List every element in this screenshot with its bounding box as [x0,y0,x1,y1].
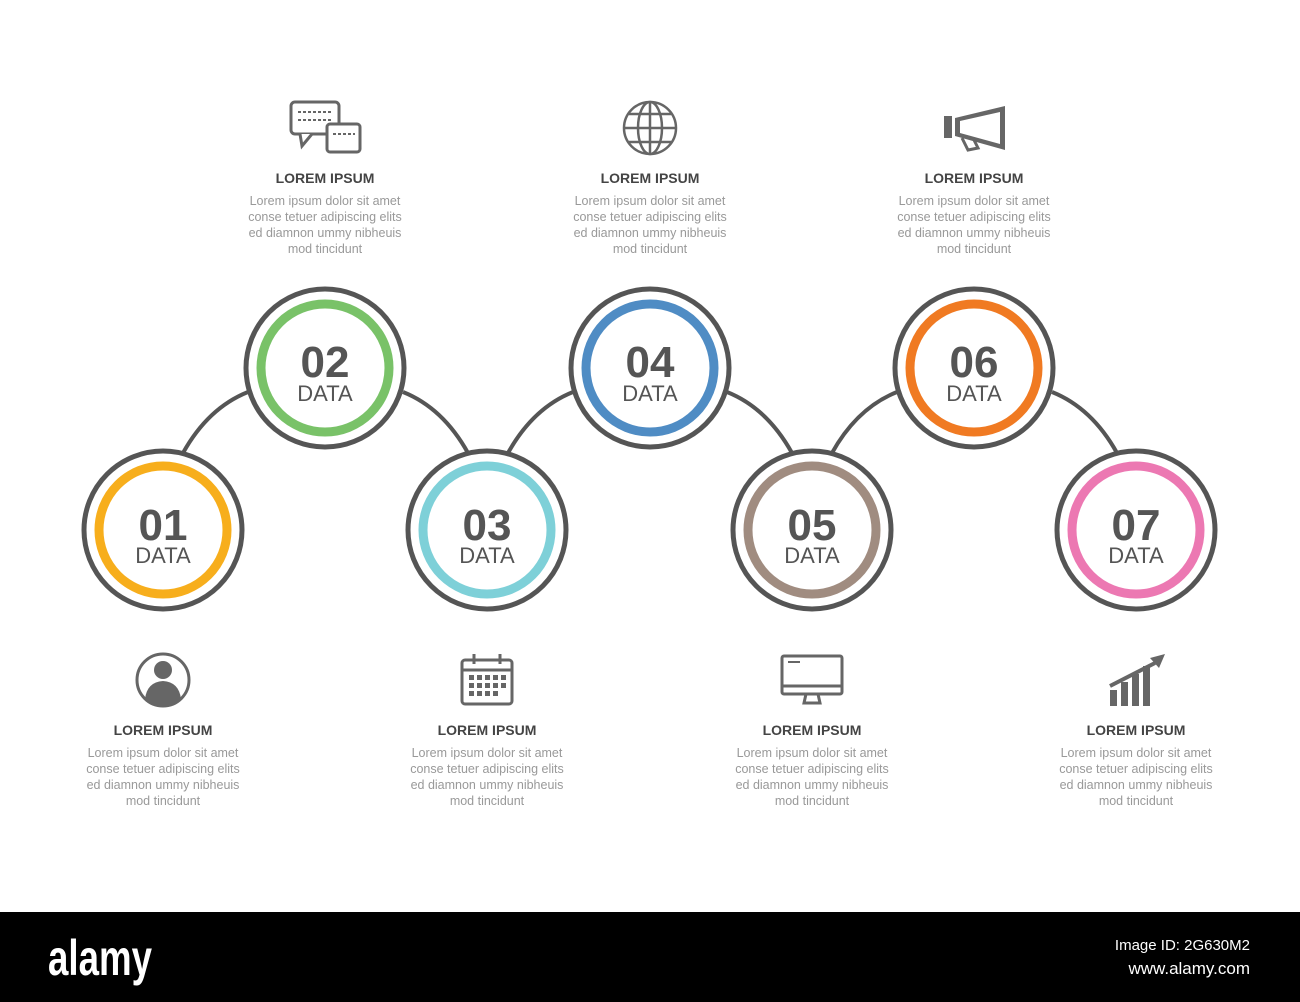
text blocks: ed diamnon ummy nibheuis [87,778,239,792]
circle 01: DATA [135,543,191,568]
text blocks: LOREM IPSUM [763,722,861,738]
text blocks: conse tetuer adipiscing elits [735,762,889,776]
circle 01 [84,451,242,609]
text blocks: Lorem ipsum dolor sit amet [899,194,1050,208]
circle 05: 05 [788,501,836,550]
text blocks: Lorem ipsum dolor sit amet [412,746,563,760]
text blocks: LOREM IPSUM [925,170,1023,186]
circle 03 [408,451,566,609]
text blocks: conse tetuer adipiscing elits [573,210,727,224]
text blocks: ed diamnon ummy nibheuis [736,778,888,792]
circle 04 [571,289,729,447]
text blocks: mod tincidunt [613,242,688,256]
text blocks: mod tincidunt [775,794,850,808]
text blocks: ed diamnon ummy nibheuis [1060,778,1212,792]
text blocks: Lorem ipsum dolor sit amet [737,746,888,760]
circle 06 [895,289,1053,447]
circle 05 [733,451,891,609]
text blocks: conse tetuer adipiscing elits [248,210,402,224]
footer bar: Image ID: 2G630M2 [1115,937,1250,954]
circle 05: DATA [784,543,840,568]
text blocks: Lorem ipsum dolor sit amet [88,746,239,760]
text blocks: Lorem ipsum dolor sit amet [1061,746,1212,760]
circle 07 [1057,451,1215,609]
text blocks: conse tetuer adipiscing elits [897,210,1051,224]
circle 07: DATA [1108,543,1164,568]
circle 04: DATA [622,381,678,406]
text blocks: conse tetuer adipiscing elits [410,762,564,776]
text blocks: LOREM IPSUM [114,722,212,738]
text blocks: ed diamnon ummy nibheuis [249,226,401,240]
text blocks: LOREM IPSUM [438,722,536,738]
text blocks: Lorem ipsum dolor sit amet [575,194,726,208]
circle 02: DATA [297,381,353,406]
text blocks: ed diamnon ummy nibheuis [898,226,1050,240]
icon: megaphone [944,106,1005,150]
icon: globe [624,102,676,154]
text blocks [86,170,1213,808]
text blocks: ed diamnon ummy nibheuis [574,226,726,240]
circle 03: 03 [463,501,511,550]
icon: monitor [782,656,842,703]
circle 01: 01 [139,501,187,550]
footer bar: alamy [48,930,152,986]
icon: calendar [462,654,512,704]
text blocks: mod tincidunt [450,794,525,808]
circle 07: 07 [1112,501,1160,550]
text blocks: conse tetuer adipiscing elits [86,762,240,776]
text blocks: mod tincidunt [288,242,363,256]
icon: person [137,654,189,706]
text blocks: mod tincidunt [937,242,1012,256]
circle 02: 02 [301,338,349,387]
circle 04: 04 [626,338,675,387]
text blocks: LOREM IPSUM [601,170,699,186]
footer bar [0,912,1300,1002]
icon: chart [1110,654,1165,706]
text blocks: mod tincidunt [1099,794,1174,808]
circle 03: DATA [459,543,515,568]
text blocks: ed diamnon ummy nibheuis [411,778,563,792]
footer bar: www.alamy.com [1127,959,1250,978]
circle 06: 06 [950,338,998,387]
text blocks: LOREM IPSUM [1087,722,1185,738]
circle 02 [246,289,404,447]
icon: chat [291,102,360,152]
text blocks: Lorem ipsum dolor sit amet [250,194,401,208]
text blocks: LOREM IPSUM [276,170,374,186]
text blocks: mod tincidunt [126,794,201,808]
connectors [183,392,1117,453]
text blocks: conse tetuer adipiscing elits [1059,762,1213,776]
circle 06: DATA [946,381,1002,406]
